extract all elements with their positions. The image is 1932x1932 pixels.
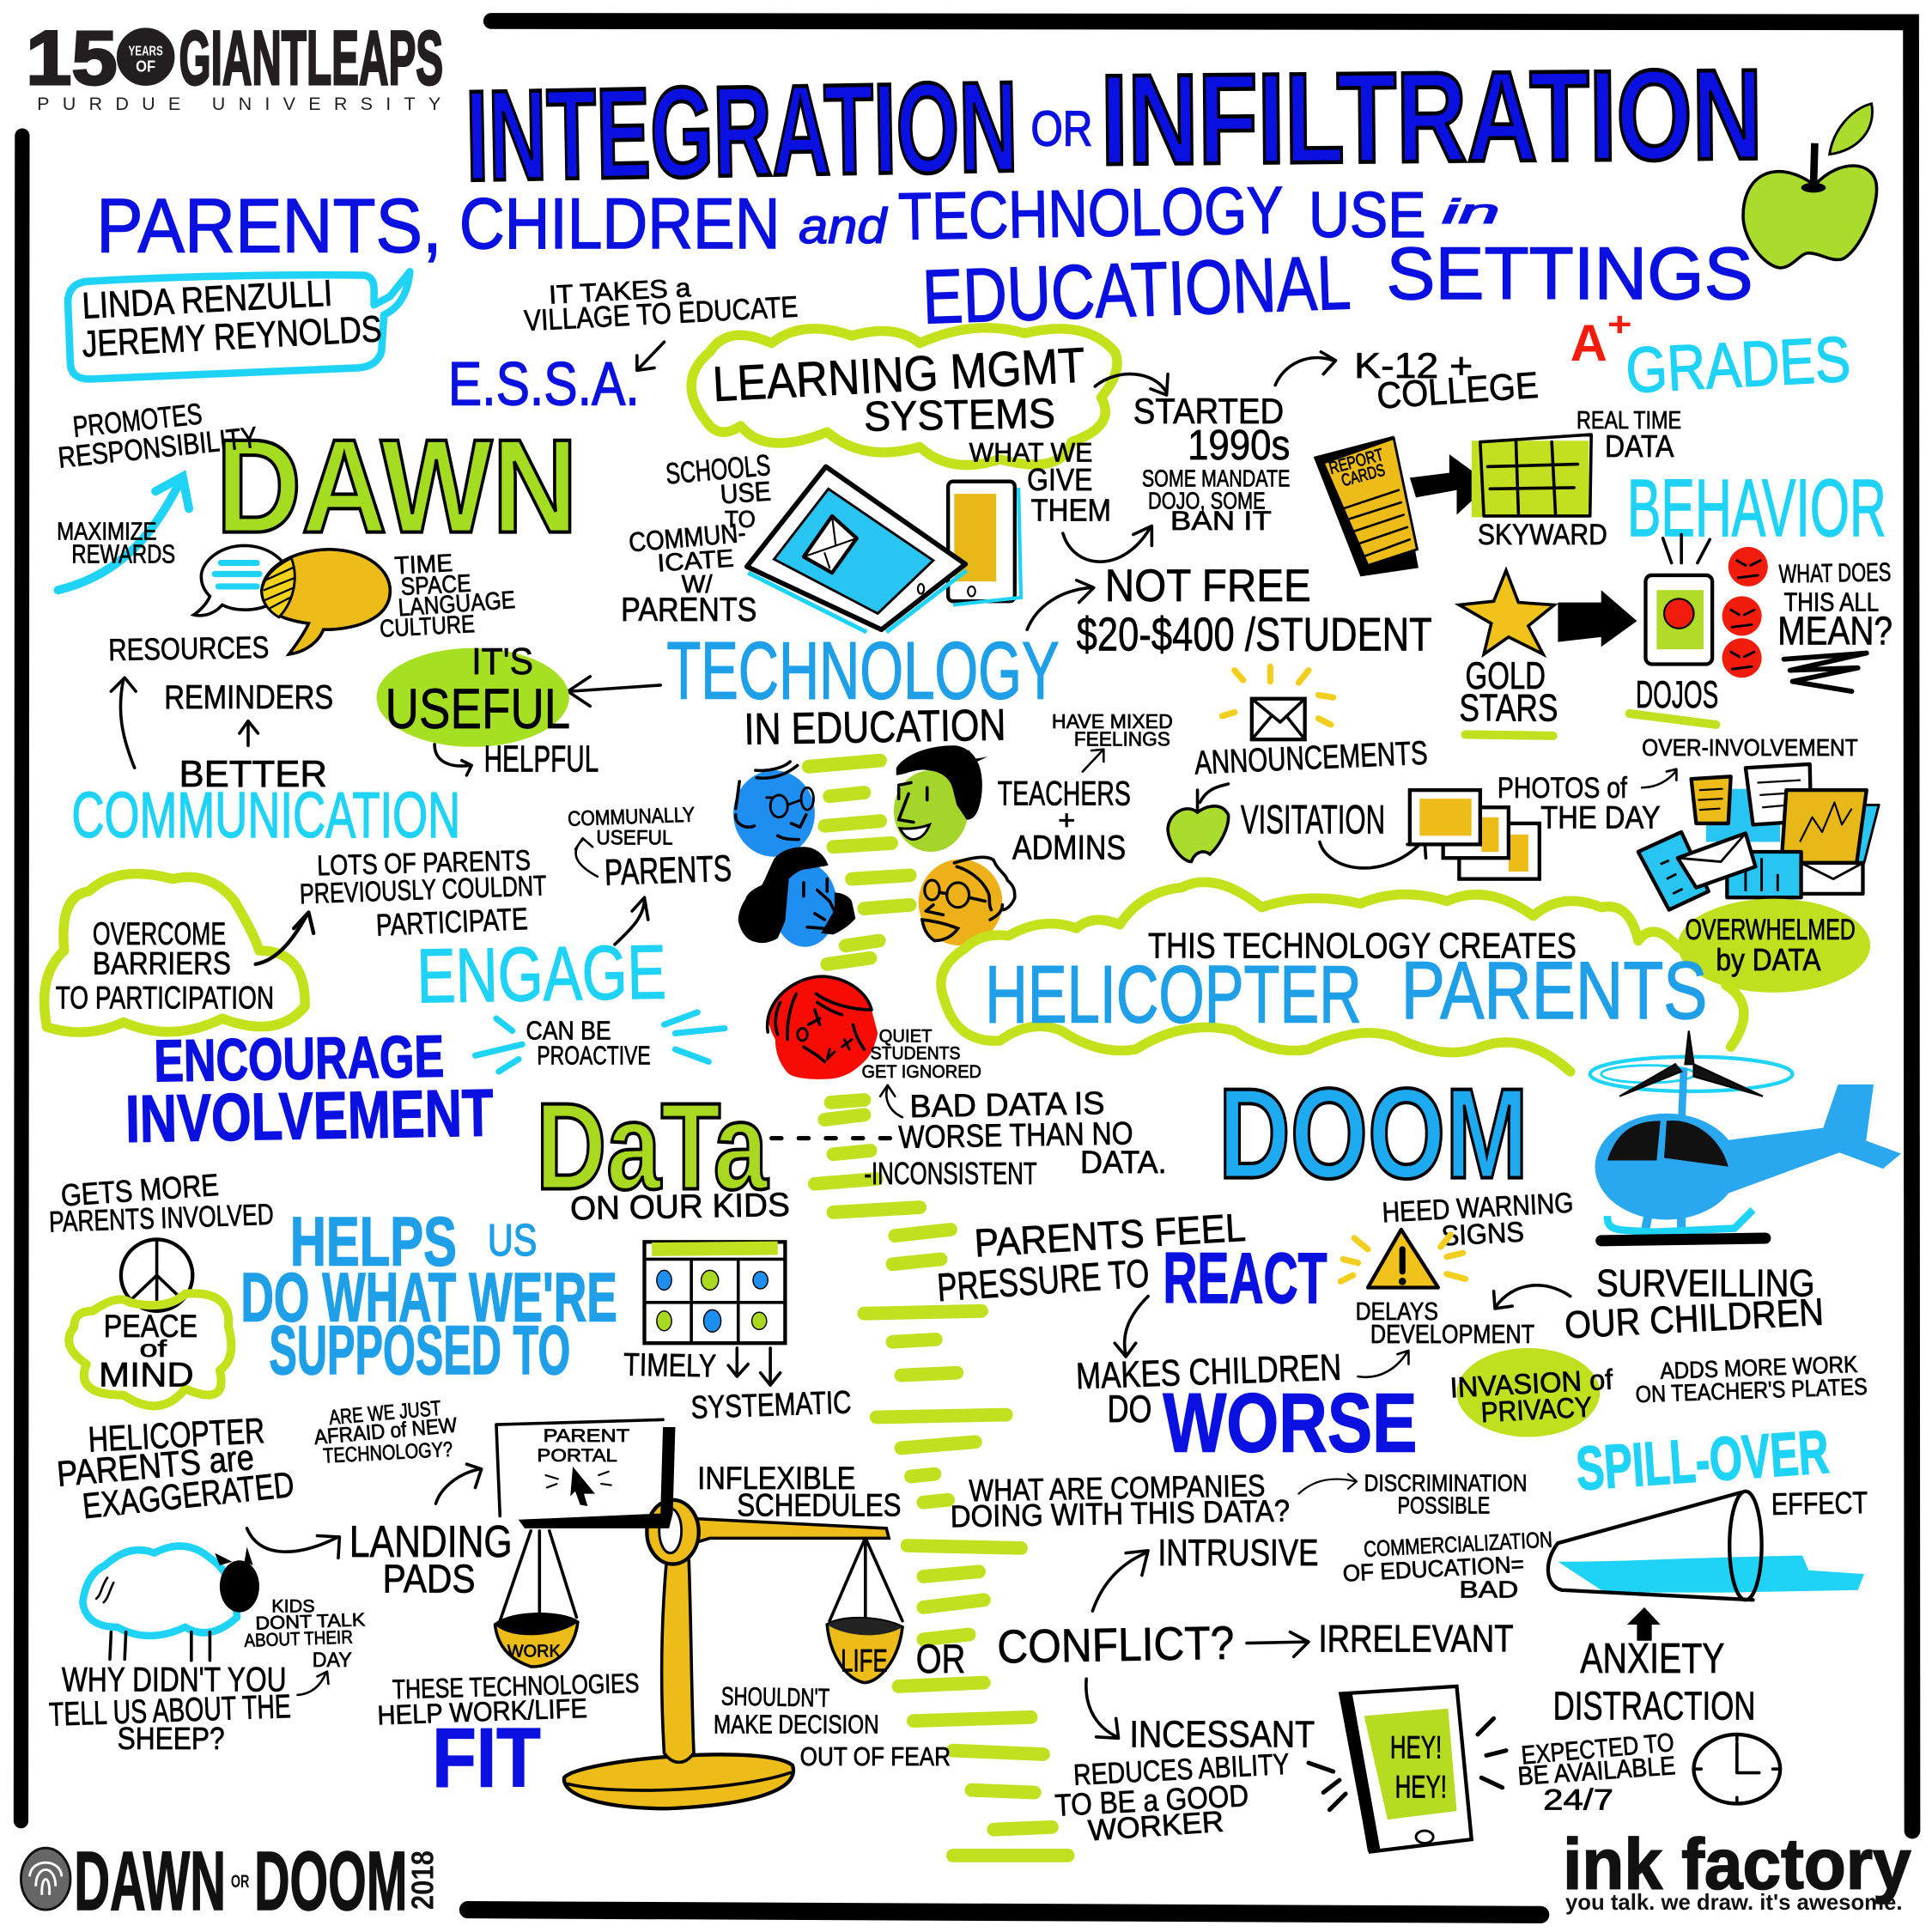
helps us do what we're supposed to: HELPS (290, 1204, 457, 1281)
quiet student head: GET IGNORED (862, 1060, 981, 1082)
surveilling, delays, invasion of privacy: PRIVACY (1480, 1391, 1593, 1429)
dawn or doom logo (21, 1834, 440, 1928)
engage and encourage involvement: PROACTIVE (537, 1042, 651, 1070)
overwhelmed by data blob: by DATA (1716, 942, 1821, 977)
conflict branches: IRRELEVANT (1318, 1619, 1514, 1661)
subtitle: EDUCATIONAL (921, 239, 1352, 340)
parents notes: LOTS OF PARENTS (317, 845, 531, 882)
icon: calendar grid: TIMELY (623, 1346, 716, 1383)
what we give them and not free: $20-$400 /STUDENT (1077, 609, 1432, 661)
surveilling, delays, invasion of privacy: DEVELOPMENT (1370, 1321, 1534, 1349)
visitation with small apple and photos (1168, 734, 1858, 879)
peace of mind: GETS MORE (60, 1167, 220, 1213)
gold star and dojo phone: STARS (1459, 688, 1558, 730)
engage and encourage involvement: ENCOURAGE (154, 1024, 445, 1094)
technology in education heading: TECHNOLOGY (666, 626, 1060, 717)
inflexible schedules: SCHEDULES (737, 1486, 902, 1522)
logo: 150 years of giant leaps: YEARS (129, 45, 163, 59)
report cards to skyward: DATA (1605, 428, 1674, 464)
what we give them and not free: WHAT WE (969, 437, 1092, 468)
parents feel pressure to react: MAKES CHILDREN (1075, 1347, 1342, 1397)
cloud: learning management systems: SYSTEMS (864, 391, 1055, 440)
work life fit (377, 1668, 951, 1804)
anxiety, distraction and clock (1517, 1636, 1780, 1817)
subtitle: CHILDREN (459, 184, 781, 264)
engage and encourage involvement: INVOLVEMENT (125, 1076, 494, 1157)
it's useful blob: IT'S (471, 641, 533, 683)
communication branch: REMINDERS (164, 679, 333, 716)
schools use to communicate with parents: W/ (682, 571, 713, 598)
teachers and admins: TEACHERS (998, 774, 1131, 812)
conflict branches: INCESSANT (1129, 1714, 1315, 1755)
started 1990s notes: STARTED (1133, 391, 1284, 431)
what we give them and not free: THEM (1030, 493, 1111, 528)
companies and commercialization notes: COMMERCIALIZATION (1364, 1528, 1553, 1562)
report cards to skyward: SKYWARD (1478, 519, 1607, 551)
report cards to skyward: REPORT (1327, 446, 1386, 478)
quiet student head (768, 976, 981, 1082)
started 1990s notes: COLLEGE (1376, 365, 1540, 417)
quiet student head: STUDENTS (871, 1042, 961, 1064)
it's useful blob: USEFUL (386, 677, 570, 741)
parents notes: COMMUNALLY (568, 804, 696, 831)
gold star and dojo phone (1459, 535, 1893, 736)
helicopter parents exaggerated: ARE WE JUST (328, 1397, 442, 1430)
helicopter parents exaggerated: PARENTS are (55, 1437, 256, 1494)
parents feel pressure to react: REACT (1163, 1238, 1327, 1318)
teachers and admins: + (1058, 805, 1075, 835)
speaker bubble: LINDA RENZULLI (81, 273, 333, 327)
surveilling, delays, invasion of privacy: ON TEACHER'S PLATES (1635, 1373, 1868, 1407)
cloud: helicopter parents: PARENTS (1401, 945, 1707, 1036)
dawn or doom logo: DOOM (254, 1834, 407, 1928)
gold star and dojo phone: GOLD (1466, 655, 1546, 697)
sheep story text: KIDS (271, 1595, 315, 1617)
companies and commercialization notes: WHAT ARE COMPANIES (969, 1467, 1266, 1508)
companies and commercialization notes: DOING WITH THIS DATA? (950, 1493, 1290, 1534)
communication branch: BETTER (179, 754, 327, 795)
title (465, 42, 1763, 208)
icon: phone (948, 482, 1021, 605)
logo: 150 years of giant leaps: GIANTLEAPS (179, 15, 443, 100)
helicopter parents exaggerated: EXAGGERATED (81, 1464, 296, 1526)
schools use to communicate with parents (621, 449, 772, 629)
started 1990s notes: DOJO, SOME (1148, 487, 1266, 513)
spine of green marker stripes (809, 761, 1068, 1856)
schools use to communicate with parents: COMMUN- (628, 517, 747, 558)
parents notes: PREVIOUSLY COULDNT (299, 870, 547, 910)
technology in education heading (666, 626, 1060, 754)
surveilling, delays, invasion of privacy: SURVEILLING (1596, 1263, 1814, 1305)
conflict branches: CONFLICT? (997, 1617, 1235, 1674)
inflexible schedules (697, 1460, 902, 1522)
parents notes (299, 804, 732, 945)
it's useful blob: HELPFUL (484, 739, 598, 781)
dawn or doom logo: 2018 (405, 1850, 440, 1910)
subtitle: TECHNOLOGY (897, 173, 1284, 254)
sheep story text: DONT TALK (255, 1608, 366, 1634)
speaker bubble (68, 271, 410, 379)
time space language culture: CULTURE (380, 611, 476, 643)
spill-over effect with cup: EFFECT (1771, 1485, 1868, 1522)
surveilling, delays, invasion of privacy: DELAYS (1356, 1298, 1438, 1326)
report cards to skyward: REAL TIME (1577, 407, 1681, 434)
icon: overlapping speech bubbles (194, 545, 390, 654)
anxiety, distraction and clock: 24/7 (1543, 1784, 1613, 1817)
overwhelmed by data blob (1678, 899, 1870, 993)
warning icon and heed warning signs: HEED WARNING (1382, 1188, 1574, 1229)
started 1990s notes: 1990s (1188, 422, 1290, 469)
E.S.S.A. note: E.S.S.A. (448, 350, 640, 419)
subtitle: SETTINGS (1387, 233, 1753, 315)
companies and commercialization notes: OF EDUCATION= (1342, 1551, 1525, 1587)
inflexible schedules: INFLEXIBLE (697, 1460, 855, 1496)
visitation with small apple and photos: VISITATION (1241, 797, 1385, 842)
icon: balance scale with parent portal: WORK (507, 1642, 561, 1661)
grades heading: A (1571, 313, 1607, 372)
time space language culture (380, 550, 516, 643)
announcements with envelope (1194, 666, 1429, 781)
grades heading: GRADES (1624, 323, 1852, 406)
gold star and dojo phone: THIS ALL (1783, 589, 1879, 617)
sheep story text: TELL US ABOUT THE (48, 1688, 291, 1734)
peace of mind: of (139, 1335, 167, 1362)
engage and encourage involvement (125, 928, 725, 1157)
helps us do what we're supposed to: DO WHAT WE'RE (240, 1259, 617, 1336)
title: OR (1030, 102, 1092, 157)
report cards to skyward: CARDS (1340, 461, 1388, 490)
parents notes: PARENTS (604, 848, 732, 894)
conflict branches: TO BE a GOOD (1054, 1777, 1249, 1823)
grades heading (1571, 305, 1852, 406)
schools use to communicate with parents: USE (720, 476, 772, 510)
announcements with envelope: ANNOUNCEMENTS (1194, 735, 1429, 781)
helicopter parents exaggerated: PADS (383, 1557, 476, 1601)
title: INTEGRATION (465, 55, 1019, 208)
DOOM heading: DOOM (1218, 1062, 1528, 1206)
work life fit: MAKE DECISION (714, 1711, 879, 1740)
E.S.S.A. note: IT TAKES a (548, 274, 691, 310)
maximize rewards and promotes responsibility: RESPONSIBILITY (57, 422, 258, 475)
helps us do what we're supposed to (240, 1204, 617, 1389)
maximize rewards and promotes responsibility: PROMOTES (71, 398, 204, 444)
logo: 150 years of giant leaps: PURDUE UNIVERSITY (37, 93, 440, 114)
icon: tablet with envelope (747, 466, 967, 632)
surveilling, delays, invasion of privacy (1356, 1263, 1868, 1437)
peace of mind: MIND (99, 1356, 194, 1394)
started 1990s notes: SOME MANDATE (1142, 465, 1290, 491)
dawn or doom logo: DAWN (74, 1834, 226, 1928)
work life fit: FIT (432, 1710, 541, 1804)
companies and commercialization notes: DISCRIMINATION (1364, 1470, 1527, 1497)
icon: sheep (82, 1546, 259, 1661)
icon: balance scale with parent portal: OR (916, 1637, 965, 1682)
helicopter parents exaggerated: LANDING (349, 1516, 513, 1566)
parents feel pressure to react: PARENTS FEEL (973, 1205, 1247, 1266)
cloud: learning management systems: LEARNING MGMT (711, 338, 1086, 412)
peace of mind (48, 1167, 274, 1406)
conflict branches: WORKER (1087, 1806, 1224, 1848)
sheep story text (48, 1595, 366, 1756)
maximize rewards and promotes responsibility (57, 398, 258, 590)
teachers and admins: ADMINS (1012, 829, 1126, 867)
visitation with small apple and photos: OVER-INVOLVEMENT (1642, 734, 1858, 761)
time space language culture: LANGUAGE (398, 586, 516, 622)
sheep story text: WHY DIDN'T YOU (62, 1661, 287, 1699)
surveilling, delays, invasion of privacy: INVASION of (1449, 1364, 1614, 1404)
ink factory logo: you talk. we draw. it's awesome. (1565, 1891, 1902, 1915)
teachers and admins: FEELINGS (1074, 727, 1170, 750)
cloud: helicopter parents: HELICOPTER (985, 949, 1362, 1040)
faces: parents and teachers (733, 745, 1015, 947)
work life fit: OUT OF FEAR (800, 1743, 951, 1771)
parents notes: USEFUL (596, 826, 673, 849)
teachers and admins (998, 710, 1173, 867)
engage and encourage involvement: CAN BE (526, 1018, 611, 1046)
icon: helicopter (1590, 1030, 1898, 1241)
E.S.S.A. note: VILLAGE TO EDUCATE (523, 291, 799, 337)
companies and commercialization notes: BAD (1459, 1576, 1518, 1602)
gold star and dojo phone: MEAN? (1777, 608, 1893, 653)
started 1990s notes: K-12 + (1354, 345, 1473, 386)
icon: data collage (1638, 764, 1879, 910)
helps us do what we're supposed to: SUPPOSED TO (269, 1312, 570, 1389)
what we give them and not free (969, 437, 1432, 661)
parents feel pressure to react: DO (1108, 1388, 1151, 1431)
spill-over effect with cup (1548, 1418, 1868, 1641)
cloud: learning management systems (691, 328, 1117, 465)
time space language culture: SPACE (400, 570, 471, 601)
teachers and admins: HAVE MIXED (1052, 710, 1173, 732)
it's useful blob (376, 641, 660, 781)
helicopter parents exaggerated (55, 1397, 513, 1601)
helicopter parents exaggerated: HELICOPTER (88, 1410, 265, 1460)
warning icon and heed warning signs (1340, 1188, 1574, 1288)
helicopter parents exaggerated: AFRAID of NEW (313, 1414, 458, 1449)
helicopter parents exaggerated: TECHNOLOGY? (323, 1438, 453, 1468)
icon: balance scale with parent portal (495, 1419, 965, 1808)
bad data notes (864, 1084, 1167, 1191)
icon: phone with hey hey: HEY! (1390, 1728, 1442, 1765)
logo: 150 years of giant leaps: 15 (26, 15, 118, 100)
DAWN heading: DAWN (216, 411, 578, 561)
what we give them and not free: GIVE (1027, 462, 1092, 497)
technology in education heading: IN EDUCATION (744, 700, 1006, 754)
icon: balance scale with parent portal: PORTAL (537, 1444, 617, 1466)
speaker bubble: JEREMY REYNOLDS (81, 308, 383, 365)
maximize rewards and promotes responsibility: MAXIMIZE (57, 518, 157, 545)
started 1990s notes: BAN IT (1170, 505, 1272, 536)
sheep story text: SHEEP? (118, 1721, 225, 1756)
schools use to communicate with parents: ICATE (657, 544, 735, 578)
warning icon and heed warning signs: SIGNS (1441, 1217, 1525, 1253)
visitation with small apple and photos: PHOTOS of (1498, 772, 1627, 805)
what we give them and not free: NOT FREE (1105, 561, 1311, 611)
parents notes: PARTICIPATE (375, 901, 529, 943)
logo: 150 years of giant leaps (26, 15, 443, 114)
sheep story text: DAY (313, 1649, 352, 1672)
communication branch (71, 629, 460, 851)
conflict branches (997, 1533, 1514, 1848)
cloud: helicopter parents (941, 882, 1744, 1072)
report cards to skyward (1314, 407, 1681, 576)
peace of mind: PEACE (104, 1308, 197, 1344)
schools use to communicate with parents: SCHOOLS (665, 449, 772, 491)
DATA heading: DaTa (536, 1078, 769, 1216)
schools use to communicate with parents: TO (725, 506, 756, 532)
subtitle: in (1442, 192, 1500, 231)
cloud: overcome barriers: OVERCOME (93, 915, 226, 951)
icon: apple (1743, 104, 1877, 268)
communication branch: RESOURCES (108, 629, 270, 667)
cloud: overcome barriers: TO PARTICIPATION (56, 980, 274, 1016)
anxiety, distraction and clock: ANXIETY (1580, 1636, 1724, 1682)
icon: calendar grid: SYSTEMATIC (690, 1383, 852, 1425)
logo: 150 years of giant leaps: OF (136, 57, 155, 75)
icon: calendar grid (623, 1242, 852, 1425)
quiet student head: QUIET (879, 1024, 932, 1046)
parents feel pressure to react: PRESSURE TO (936, 1250, 1151, 1309)
surveilling, delays, invasion of privacy: ADDS MORE WORK (1660, 1351, 1858, 1384)
time space language culture: TIME (394, 550, 453, 580)
subtitle: USE (1309, 179, 1426, 251)
bad data notes: WORSE THAN NO (898, 1115, 1133, 1155)
work life fit: SHOULDN'T (720, 1682, 830, 1713)
helps us do what we're supposed to: US (488, 1215, 537, 1265)
started 1990s notes (1095, 345, 1540, 536)
conflict branches: INTRUSIVE (1158, 1533, 1318, 1574)
gold star and dojo phone: WHAT DOES (1778, 558, 1892, 589)
bad data notes: DATA. (1080, 1144, 1167, 1180)
dawn or doom logo: OR (231, 1870, 250, 1892)
overwhelmed by data blob: OVERWHELMED (1685, 914, 1856, 946)
bad data notes: BAD DATA IS (909, 1084, 1105, 1124)
cloud: overcome barriers (45, 874, 313, 1032)
DATA heading: ON OUR KIDS (570, 1187, 790, 1227)
parents feel pressure to react (936, 1205, 1417, 1470)
ink factory logo: ink factory (1563, 1825, 1911, 1905)
sheep story text: ABOUT THEIR (244, 1625, 353, 1651)
anxiety, distraction and clock: EXPECTED TO (1520, 1728, 1675, 1770)
cloud: overcome barriers: BARRIERS (93, 945, 231, 981)
work life fit: THESE TECHNOLOGIES (392, 1668, 640, 1704)
anxiety, distraction and clock: BE AVAILABLE (1517, 1752, 1676, 1791)
conflict branches: REDUCES ABILITY (1072, 1748, 1290, 1792)
anxiety, distraction and clock: DISTRACTION (1553, 1684, 1755, 1728)
companies and commercialization notes (950, 1467, 1553, 1602)
E.S.S.A. note (448, 274, 799, 419)
communication branch: COMMUNICATION (71, 779, 460, 851)
gold star and dojo phone: DOJOS (1636, 674, 1718, 716)
icon: phone with hey hey (1309, 1686, 1506, 1852)
parents feel pressure to react: WORSE (1163, 1376, 1417, 1470)
subtitle: and (799, 199, 888, 254)
maximize rewards and promotes responsibility: REWARDS (71, 541, 175, 569)
visitation with small apple and photos: THE DAY (1540, 799, 1661, 835)
schools use to communicate with parents: PARENTS (621, 592, 756, 629)
peace of mind: PARENTS INVOLVED (48, 1199, 274, 1239)
grades heading: + (1607, 305, 1632, 343)
icon: balance scale with parent portal: PARENT (544, 1425, 629, 1446)
work life fit: HELP WORK/LIFE (377, 1692, 587, 1730)
icon: phone with hey hey: HEY! (1395, 1768, 1447, 1804)
bad data notes: -INCONSISTENT (864, 1156, 1037, 1191)
companies and commercialization notes: POSSIBLE (1397, 1492, 1490, 1519)
subtitle (96, 173, 1753, 340)
icon: balance scale with parent portal: LIFE (841, 1643, 888, 1679)
subtitle: PARENTS, (96, 182, 442, 268)
surveilling, delays, invasion of privacy: OUR CHILDREN (1564, 1291, 1825, 1346)
cloud: helicopter parents: THIS TECHNOLOGY CREATES (1148, 926, 1577, 966)
engage and encourage involvement: ENGAGE (416, 928, 667, 1018)
